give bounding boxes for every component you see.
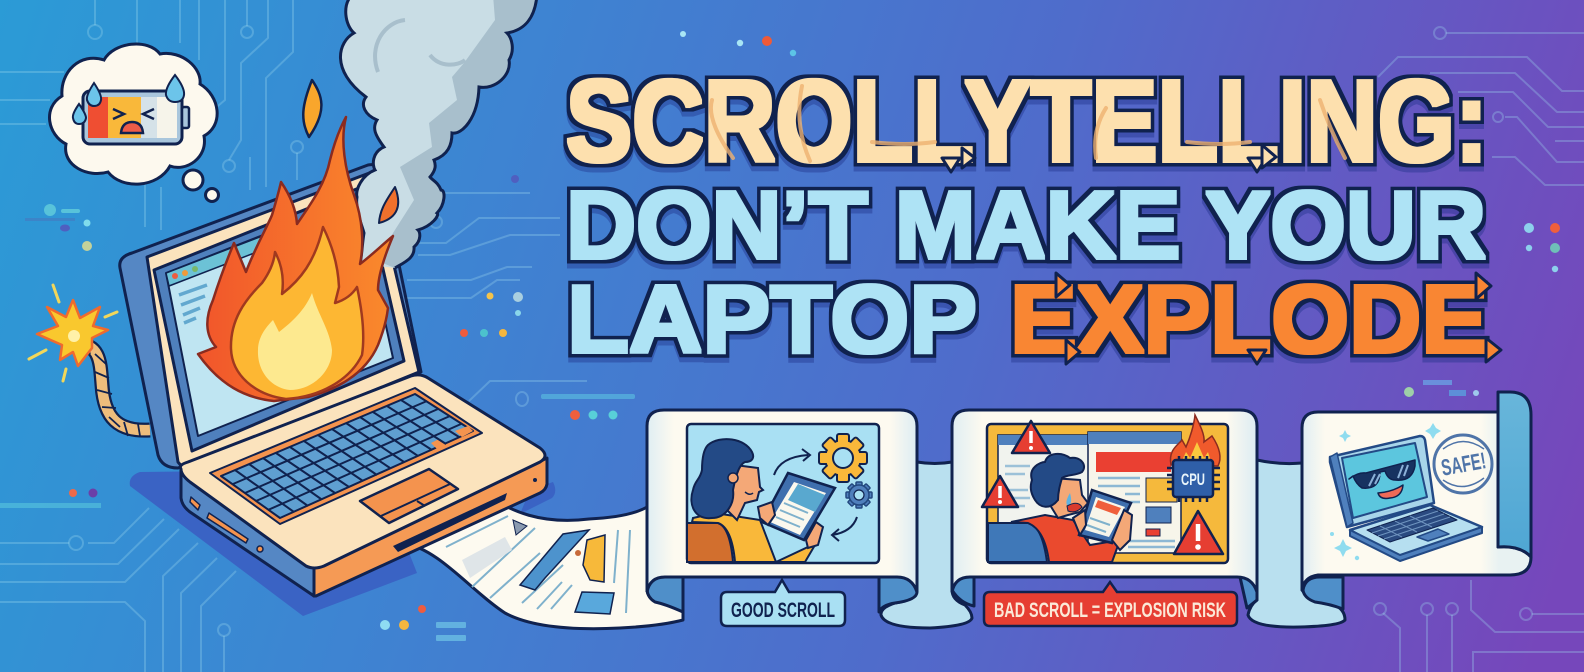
- label: good scroll: [721, 580, 845, 626]
- icon: warning top: [1012, 421, 1050, 453]
- title line 2: DON’T MAKE YOUR: [566, 172, 1486, 279]
- paper strip from laptop: [404, 498, 683, 629]
- title: [566, 56, 1501, 373]
- illustration: woman with tablet: [687, 424, 879, 563]
- label: bad scroll: [984, 582, 1237, 626]
- flame: [198, 80, 398, 401]
- scroll panel strips: [647, 460, 1345, 628]
- panel: bad scroll: [952, 410, 1257, 592]
- thought bubble with crying battery: [50, 44, 218, 201]
- sparkles: [1330, 423, 1441, 560]
- panel: safe: [1302, 392, 1531, 590]
- browser right: [1088, 432, 1181, 553]
- icon: gears: [819, 434, 872, 508]
- icon: ember top: [303, 80, 321, 137]
- illustration: cool laptop: [1330, 436, 1482, 561]
- touchpad: [360, 469, 458, 523]
- bomb fuse: [76, 338, 150, 436]
- explode arrowheads: [1056, 273, 1501, 364]
- icon: warning left: [982, 476, 1018, 507]
- laptop base: [180, 375, 547, 596]
- stamp: SAFE!: [1434, 435, 1492, 493]
- label: good scroll: GOOD SCROLL: [731, 599, 835, 622]
- stamp: SAFE!: SAFE!: [1439, 447, 1488, 481]
- browser left: [998, 435, 1092, 523]
- illustration: stressed man with overheating CPU: [982, 415, 1228, 563]
- smoke: [340, 0, 537, 268]
- icon: ember side: [379, 187, 398, 223]
- title line 1 arrowheads: [942, 145, 1276, 172]
- laptop lid: [120, 165, 421, 468]
- label: bad scroll: BAD SCROLL = EXPLOSION RISK: [994, 599, 1226, 622]
- title line 1 arrow folds: [711, 86, 1345, 161]
- icon: CPU on fire: [1167, 415, 1220, 502]
- icon: CPU on fire: CPU: [1181, 470, 1205, 489]
- icon: warning right: [1174, 511, 1223, 554]
- keyboard: [210, 388, 482, 524]
- sunglasses: [1349, 460, 1415, 488]
- panel: good scroll: [647, 410, 917, 592]
- icon: cycle arrows: [774, 449, 857, 541]
- title line 3: [567, 266, 1488, 373]
- title line 3: EXPLODE: [1010, 266, 1488, 373]
- laptop shadow: [130, 470, 555, 616]
- icon: spark: [29, 285, 117, 381]
- title line 3: LAPTOP: [567, 266, 977, 373]
- laptop: [120, 165, 547, 596]
- icon: battery: [73, 75, 189, 144]
